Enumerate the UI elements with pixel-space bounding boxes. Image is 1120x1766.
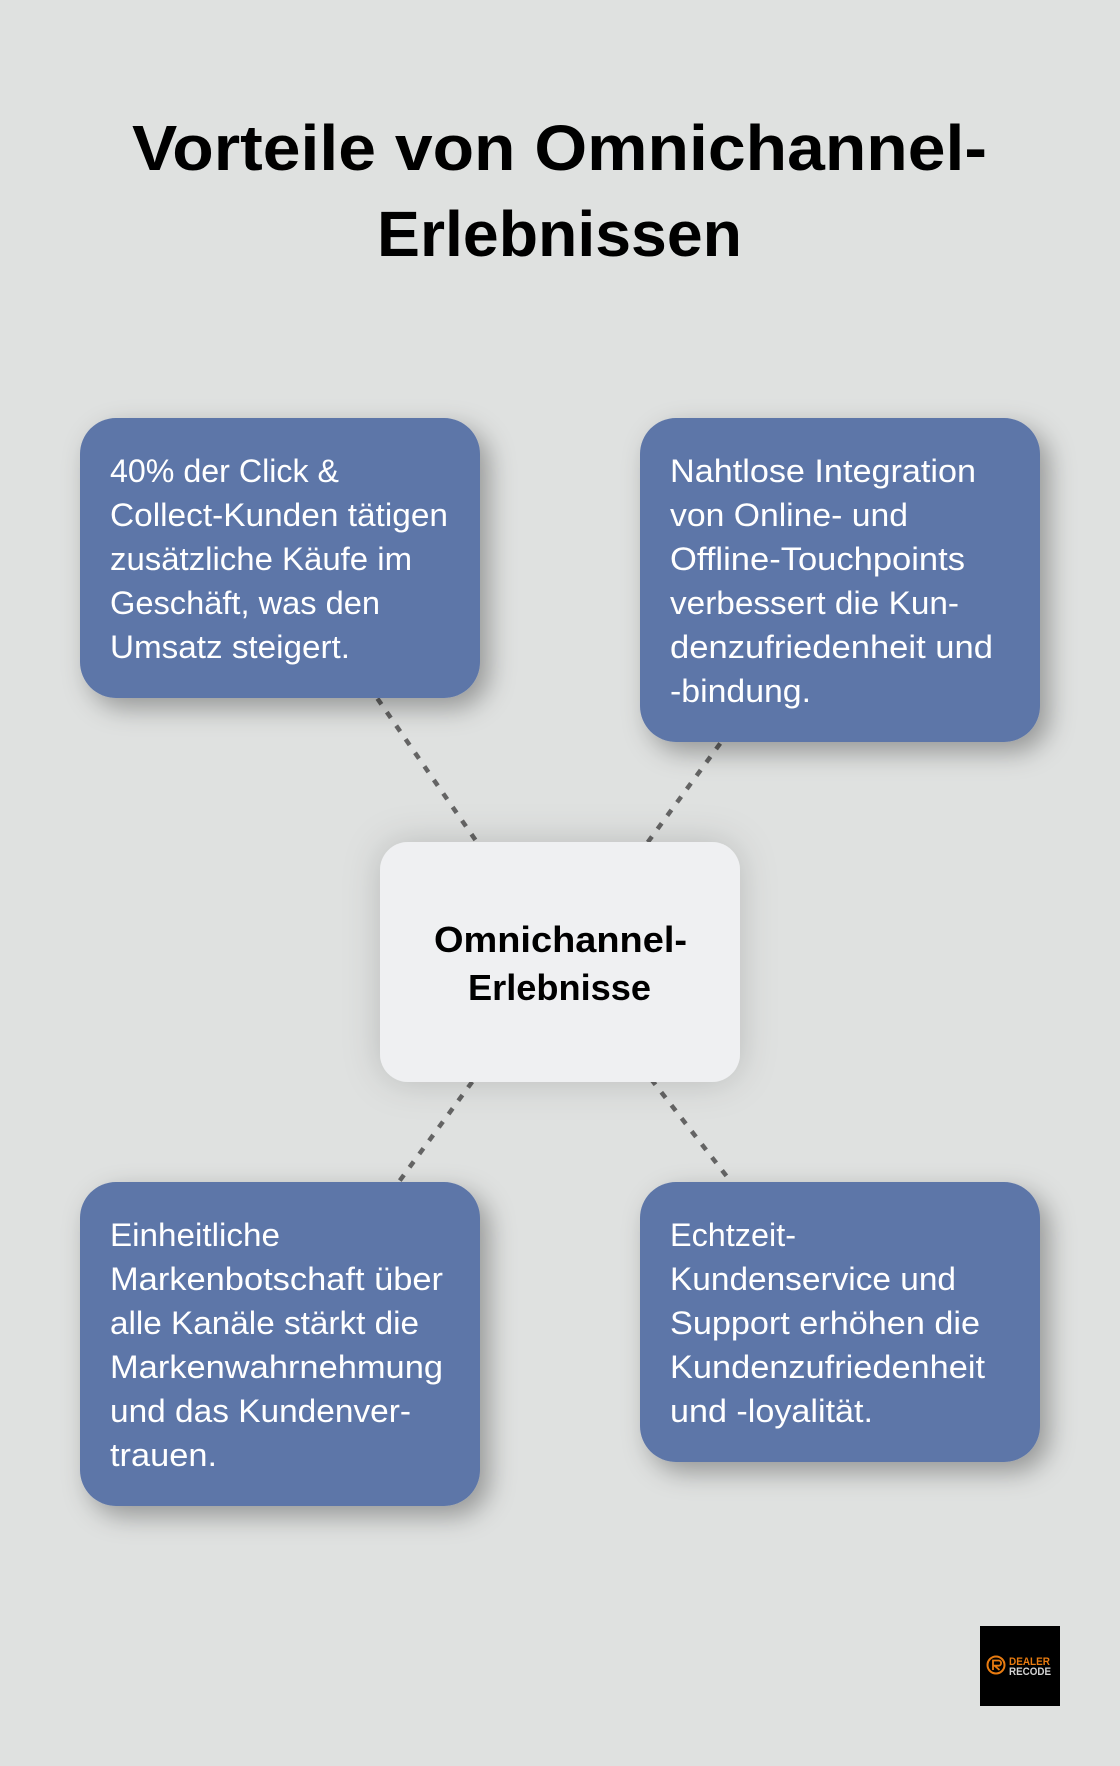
panel: echtzeit kundenservice: [640, 1182, 1040, 1462]
panel: echtzeit kundenservice: und -loyalität.: [670, 1393, 873, 1429]
panel: nahtlose integration: [640, 418, 1040, 742]
panel: echtzeit kundenservice: Kundenservice und: [670, 1261, 956, 1297]
panel: click and collect: Geschäft, was den: [110, 585, 380, 621]
panel: click and collect: Umsatz steigert.: [110, 629, 350, 665]
panel: einheitliche markenbotschaft: Markenbotschaft über: [110, 1261, 443, 1297]
panel: click and collect: [80, 418, 480, 698]
panel: einheitliche markenbotschaft: und das Kundenver-: [110, 1393, 411, 1429]
title: Vorteile von Omnichannel-: [132, 112, 987, 184]
panel: einheitliche markenbotschaft: [80, 1182, 480, 1506]
logo: dealer recode: DEALER: [1009, 1656, 1050, 1668]
panel: einheitliche markenbotschaft: Markenwahrnehmung: [110, 1349, 443, 1385]
panel: nahtlose integration: denzufriedenheit und: [670, 629, 993, 665]
panel: click and collect: zusätzliche Käufe im: [110, 541, 412, 577]
panel: center node: Erlebnisse: [468, 967, 651, 1008]
panel: echtzeit kundenservice: Echtzeit-: [670, 1217, 796, 1253]
panel: center node: [380, 842, 740, 1082]
title: Erlebnissen: [377, 198, 742, 270]
panel: einheitliche markenbotschaft: trauen.: [110, 1437, 217, 1473]
panel: center node: Omnichannel-: [434, 919, 687, 960]
logo: dealer recode: [980, 1626, 1060, 1706]
panel: click and collect: Collect-Kunden tätigen: [110, 497, 448, 533]
dashed connectors: [280, 558, 840, 1344]
panel: echtzeit kundenservice: Kundenzufriedenheit: [670, 1349, 985, 1385]
panel: echtzeit kundenservice: Support erhöhen die: [670, 1305, 980, 1341]
panel: nahtlose integration: -bindung.: [670, 673, 811, 709]
panel: nahtlose integration: Offline-Touchpoints: [670, 541, 965, 577]
panel: einheitliche markenbotschaft: Einheitliche: [110, 1217, 280, 1253]
panel: nahtlose integration: von Online- und: [670, 497, 908, 533]
title: [132, 112, 987, 270]
logo: dealer recode: RECODE: [1009, 1666, 1051, 1678]
panel: nahtlose integration: Nahtlose Integration: [670, 453, 976, 489]
panel: click and collect: 40% der Click &: [110, 453, 339, 489]
panel: nahtlose integration: verbessert die Kun-: [670, 585, 959, 621]
panel: einheitliche markenbotschaft: alle Kanäle stärkt die: [110, 1305, 419, 1341]
